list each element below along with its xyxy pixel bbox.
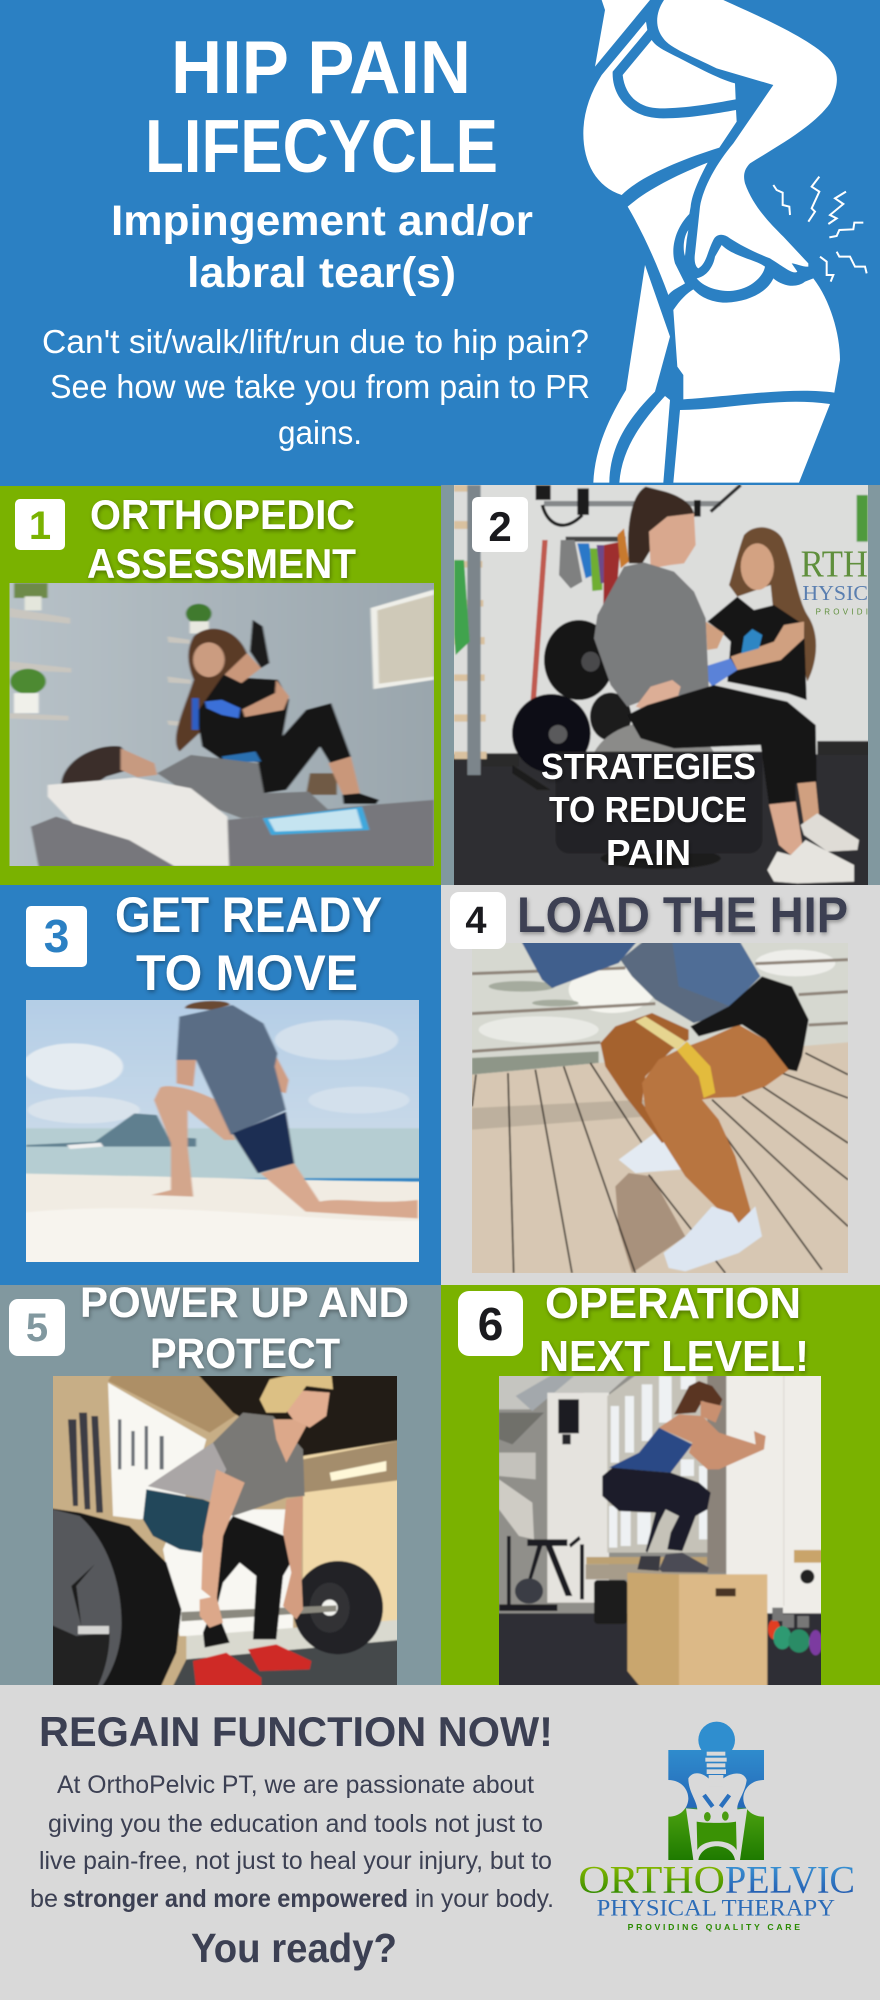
body text: giving you the education and tools not just to: [48, 1810, 543, 1838]
body text: [30, 1771, 554, 1913]
panel: step 5 power up and protect: [0, 1279, 441, 1696]
heading: PAIN: [606, 832, 691, 873]
body text: stronger and more empowered: [63, 1885, 408, 1913]
number badge 2: [472, 497, 528, 552]
heading: [80, 1279, 409, 1378]
heading: ASSESSMENT: [87, 540, 356, 587]
panel: call to action: [0, 1685, 880, 2000]
wordmark: PHYSICAL THERAPY: [597, 1896, 835, 1922]
heading: POWER UP AND: [80, 1279, 409, 1327]
wall sign lettering in photo: [801, 544, 868, 616]
heading: TO MOVE: [136, 945, 358, 1001]
photo: deadlift: [53, 1376, 397, 1685]
wordmark: ORTHO: [578, 1858, 725, 1902]
number badge 4: [450, 892, 506, 949]
panel: step 3 get ready to move: [0, 885, 441, 1285]
logo: OrthoPelvic Physical Therapy: [578, 1722, 855, 1932]
panel: step 1 orthopedic assessment: [0, 486, 455, 885]
body text: At OrthoPelvic PT, we are passionate about: [57, 1771, 534, 1799]
heading: ORTHOPEDIC: [90, 491, 355, 538]
photo: assessment on table: [10, 583, 434, 866]
heading: LOAD THE HIP: [517, 887, 848, 943]
heading: NEXT LEVEL!: [539, 1332, 809, 1381]
intro text: [42, 323, 590, 451]
panel: step 2 strategies to reduce pain: [441, 475, 880, 895]
heading: STRATEGIES: [541, 746, 756, 787]
panel: header: [0, 0, 880, 486]
heading: PROTECT: [150, 1330, 340, 1378]
heading: TO REDUCE: [549, 789, 747, 830]
wall sign lettering in photo: HYSIC: [802, 583, 868, 605]
photo: exercise ball with therapist: [454, 485, 868, 885]
logo: OrthoPelvic Physical Therapy: PROVIDING QUALITY CARE: [628, 1922, 800, 1932]
heading: [115, 887, 382, 1001]
heading: GET READY: [115, 887, 382, 943]
heading: [87, 491, 356, 587]
number badge 3: 3: [44, 910, 69, 962]
subtitle: labral tear(s): [187, 249, 456, 297]
number badge 5: 5: [26, 1306, 48, 1350]
number badge 1: [15, 499, 65, 550]
number badge 3: [26, 906, 87, 967]
panel: step 6 operation next level: [441, 1279, 880, 1697]
heading: REGAIN FUNCTION NOW!: [39, 1708, 553, 1755]
intro text: Can't sit/walk/lift/run due to hip pain?: [42, 323, 589, 360]
body text: be: [30, 1885, 58, 1913]
intro text: See how we take you from pain to PR: [50, 368, 590, 405]
number badge 4: 4: [465, 900, 487, 942]
body text: in your body.: [415, 1885, 554, 1913]
heading: [539, 1279, 809, 1381]
intro text: gains.: [278, 414, 362, 451]
number badge 5: [9, 1299, 65, 1356]
heading: [541, 746, 756, 873]
subtitle: Impingement and/or: [111, 197, 533, 245]
wall sign lettering in photo: RTH: [801, 544, 868, 586]
title: [145, 25, 498, 188]
number badge 2: 2: [488, 503, 512, 550]
number badge 6: [458, 1291, 523, 1356]
icon: pain sparks: [773, 177, 867, 282]
number badge 6: 6: [478, 1298, 503, 1350]
photo: box jump: [499, 1376, 821, 1685]
photo: lunge on the beach: [26, 1000, 419, 1262]
number badge 1: 1: [29, 504, 51, 548]
closing question: You ready?: [191, 1925, 397, 1971]
wordmark: [578, 1858, 855, 1922]
photo: banded squat on deck: [472, 943, 848, 1273]
wall sign lettering in photo: PROVIDI: [816, 607, 868, 616]
subtitle: [111, 197, 533, 297]
heading: OPERATION: [545, 1279, 801, 1328]
spine and pelvis bones: [686, 1752, 747, 1860]
title: LIFECYCLE: [145, 104, 498, 188]
panel: step 4 load the hip: [441, 885, 880, 1285]
body text: live pain-free, not just to heal your injury, but to: [39, 1847, 552, 1875]
title: HIP PAIN: [171, 25, 471, 109]
icon: body silhouette with hip pain: [583, 0, 868, 483]
